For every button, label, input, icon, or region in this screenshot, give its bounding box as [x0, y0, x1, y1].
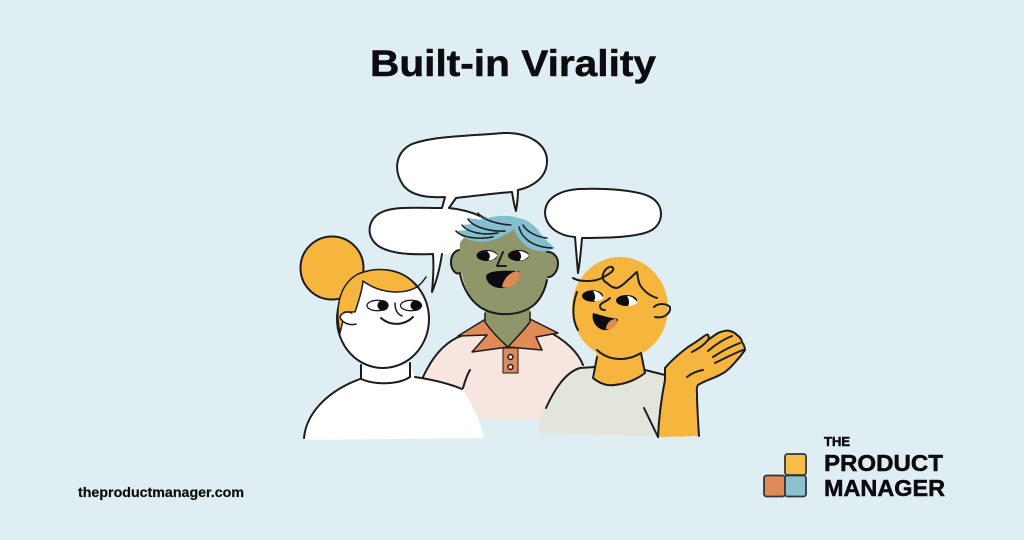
speech bubble: right: [545, 189, 661, 273]
logo wordmark: MANAGER: [824, 475, 945, 501]
head: [572, 257, 668, 359]
logo wordmark: PRODUCT: [824, 450, 944, 476]
person: orange man waving: [538, 257, 745, 437]
nose: [497, 252, 506, 266]
ears: [451, 250, 558, 277]
person: green man with blue hair: [423, 213, 586, 420]
t-shirt: [538, 367, 668, 437]
logo: [764, 435, 945, 501]
speech bubble: middle: [370, 208, 490, 292]
shirt: [423, 329, 586, 420]
mouth: [593, 313, 618, 330]
body: [304, 365, 484, 440]
hair: [338, 270, 417, 333]
eyes: [367, 300, 422, 311]
logo wordmark: [824, 435, 945, 501]
head: [337, 270, 429, 368]
arm and hand: [658, 331, 745, 437]
neck: [593, 348, 645, 385]
neck: [361, 363, 410, 383]
smile: [381, 317, 413, 324]
hair bun: [300, 236, 364, 300]
ear: [654, 304, 670, 317]
nose: [395, 303, 402, 316]
website url: theproductmanager.com: [78, 485, 244, 500]
illustration: group of people talking: [300, 133, 745, 440]
ear: [340, 312, 357, 325]
logo wordmark: THE: [824, 435, 850, 449]
blue hair: [456, 213, 555, 251]
title: Built-in Virality: [370, 42, 656, 84]
head: [460, 227, 548, 314]
eyes: [476, 250, 529, 261]
collar: [458, 319, 558, 352]
hair curl: [573, 267, 657, 298]
eyes: [582, 290, 638, 306]
neck: [485, 305, 530, 347]
mouth: [486, 271, 519, 288]
logo icon: blocks: [764, 454, 806, 496]
person: woman with orange bun: [300, 236, 484, 440]
placket with buttons: [503, 348, 518, 373]
nose: [600, 298, 610, 310]
stray stroke: [417, 277, 426, 287]
speech bubble: top: [397, 133, 547, 211]
